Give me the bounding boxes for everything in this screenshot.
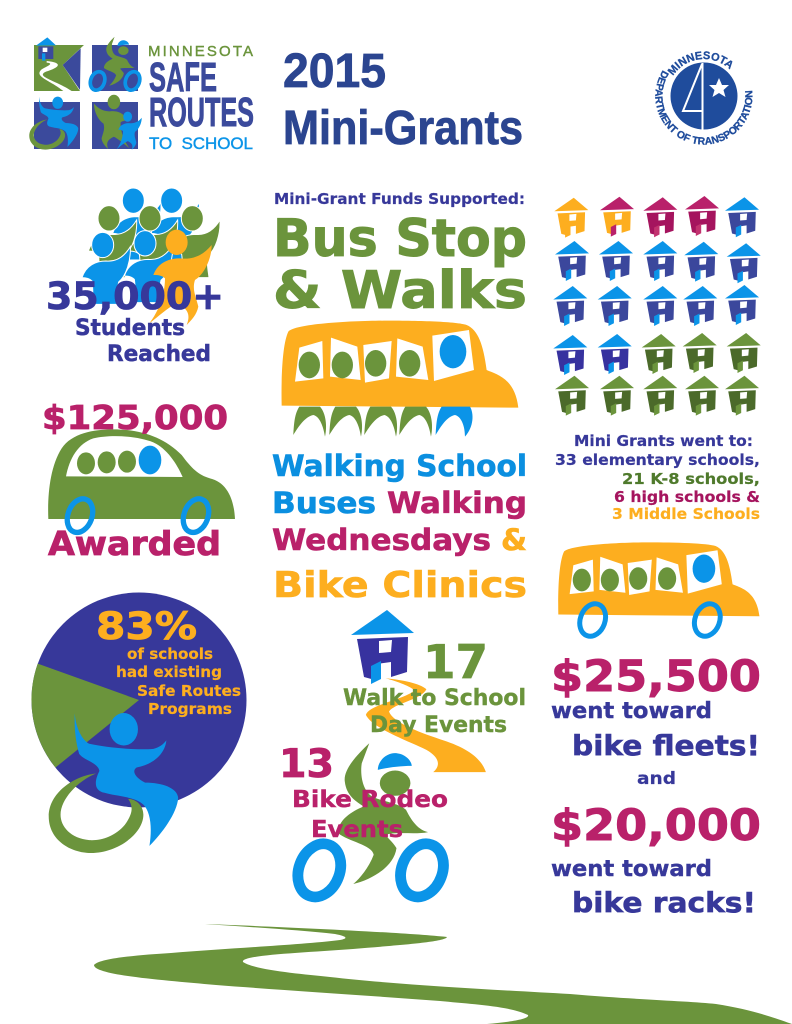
icon: green houses [555,333,761,416]
stat: 35,000+ students reached: Students [75,316,185,341]
stat: 17 walk to school day events: Day Events [370,713,507,738]
text: school breakdown: 3 Middle Schools [612,505,760,523]
icon: cyclist [291,743,451,903]
logo icon: house and road square [34,37,84,91]
stat: $20,000 bike racks: went toward [551,857,712,882]
MnDOT seal: MINNESOTA [667,51,732,76]
stat: 17 walk to school day events: Walk to School [343,686,526,711]
title: 2015 [283,45,386,98]
icon: group of students [82,188,220,325]
logo wordmark: TO SCHOOL [149,134,253,153]
text: programs supported: Buses [272,486,376,520]
icon: yellow and magenta houses [554,196,719,238]
icon: school house [351,610,414,684]
logo icon: adult and child walking [92,95,142,150]
stat: 13 bike rodeo events: 13 [279,742,334,787]
logo wordmark [148,43,254,153]
text: school breakdown: 6 high schools & [614,488,760,506]
stat: 35,000+ students reached: 35,000+ [46,275,224,318]
stat: 17 walk to school day events [343,635,526,738]
icon: school bus with wheels [558,542,759,640]
icon: walking school bus [282,321,518,437]
icon: blue houses [553,197,761,375]
icon: wheelchair user [49,713,178,853]
panel: events [279,610,526,903]
text: school breakdown: 21 K-8 schools, [622,470,760,488]
title [283,45,523,155]
stat: 83% of schools [96,605,241,718]
stat: $25,500 bike fleets: $25,500 [551,652,761,702]
logo icon: cyclist square [88,37,142,92]
logo wordmark: ROUTES [149,89,254,135]
panel: students reached [46,188,224,367]
logo wordmark: MINNESOTA [148,43,253,60]
panel: centre column headline [272,190,527,606]
logo: Minnesota Safe Routes to School [29,37,254,153]
subheading: Mini-Grant Funds Supported: [274,190,525,208]
icon: car [48,429,235,536]
MnDOT seal: DEPARTMENT OF TRANSPORTATION [655,70,753,145]
logo icon: wheelchair square [29,97,80,150]
text: school breakdown [555,432,760,523]
stat: 13 bike rodeo events [279,742,448,843]
logo wordmark: SAFE [149,54,217,100]
panel: 83 percent pie [31,592,246,853]
stat: 13 bike rodeo events: Bike Rodeo [292,787,448,813]
text: school breakdown: Mini Grants went to: [574,432,753,450]
icon: winding green road [94,924,792,1024]
text: school breakdown: 33 elementary schools, [555,451,760,469]
stat: $125,000 awarded: $125,000 [42,398,228,437]
stat: $20,000 bike racks: bike racks! [572,886,756,919]
headline: bus stop and walks [273,209,527,321]
stat: 35,000+ students reached [46,275,224,367]
headline: bus stop and walks: & Walks [273,261,527,321]
stat: $25,500 bike fleets [551,652,761,762]
stat: 17 walk to school day events: 17 [423,635,488,689]
stat: 83% of schools: had existing [116,663,222,681]
stat: $20,000 bike racks [551,801,761,919]
stat: $25,500 bike fleets: went toward [551,699,712,724]
panel: dollars awarded [42,398,235,563]
stat: 83% of schools: of schools [127,645,213,663]
text: programs supported [272,449,527,606]
panel: bike funding [551,652,761,919]
stat: 83% of schools: Safe Routes [137,682,241,700]
headline: bus stop and walks: Bus Stop [273,209,527,269]
stat: 83% of schools: Programs [148,700,232,718]
stat: $125,000 awarded: Awarded [48,524,221,563]
text: and: and [637,769,676,789]
stat: 13 bike rodeo events: Events [311,817,403,843]
stat: 35,000+ students reached: Reached [107,342,211,367]
text: programs supported: Wednesdays [272,523,491,557]
title: Mini-Grants [283,102,523,155]
icon: winding yellow road [366,678,486,772]
panel: school houses grid [553,196,761,523]
text: programs supported: Bike Clinics [273,565,527,606]
text: programs supported: & [501,523,527,557]
text: programs supported: Walking School [272,449,527,483]
pie chart [31,592,246,808]
stat: $125,000 awarded [42,398,228,563]
stat: $25,500 bike fleets: bike fleets! [572,729,760,762]
stat: 83% of schools: 83% [96,605,197,648]
text: programs supported: Walking [387,486,527,520]
stat: $20,000 bike racks: $20,000 [551,801,761,851]
